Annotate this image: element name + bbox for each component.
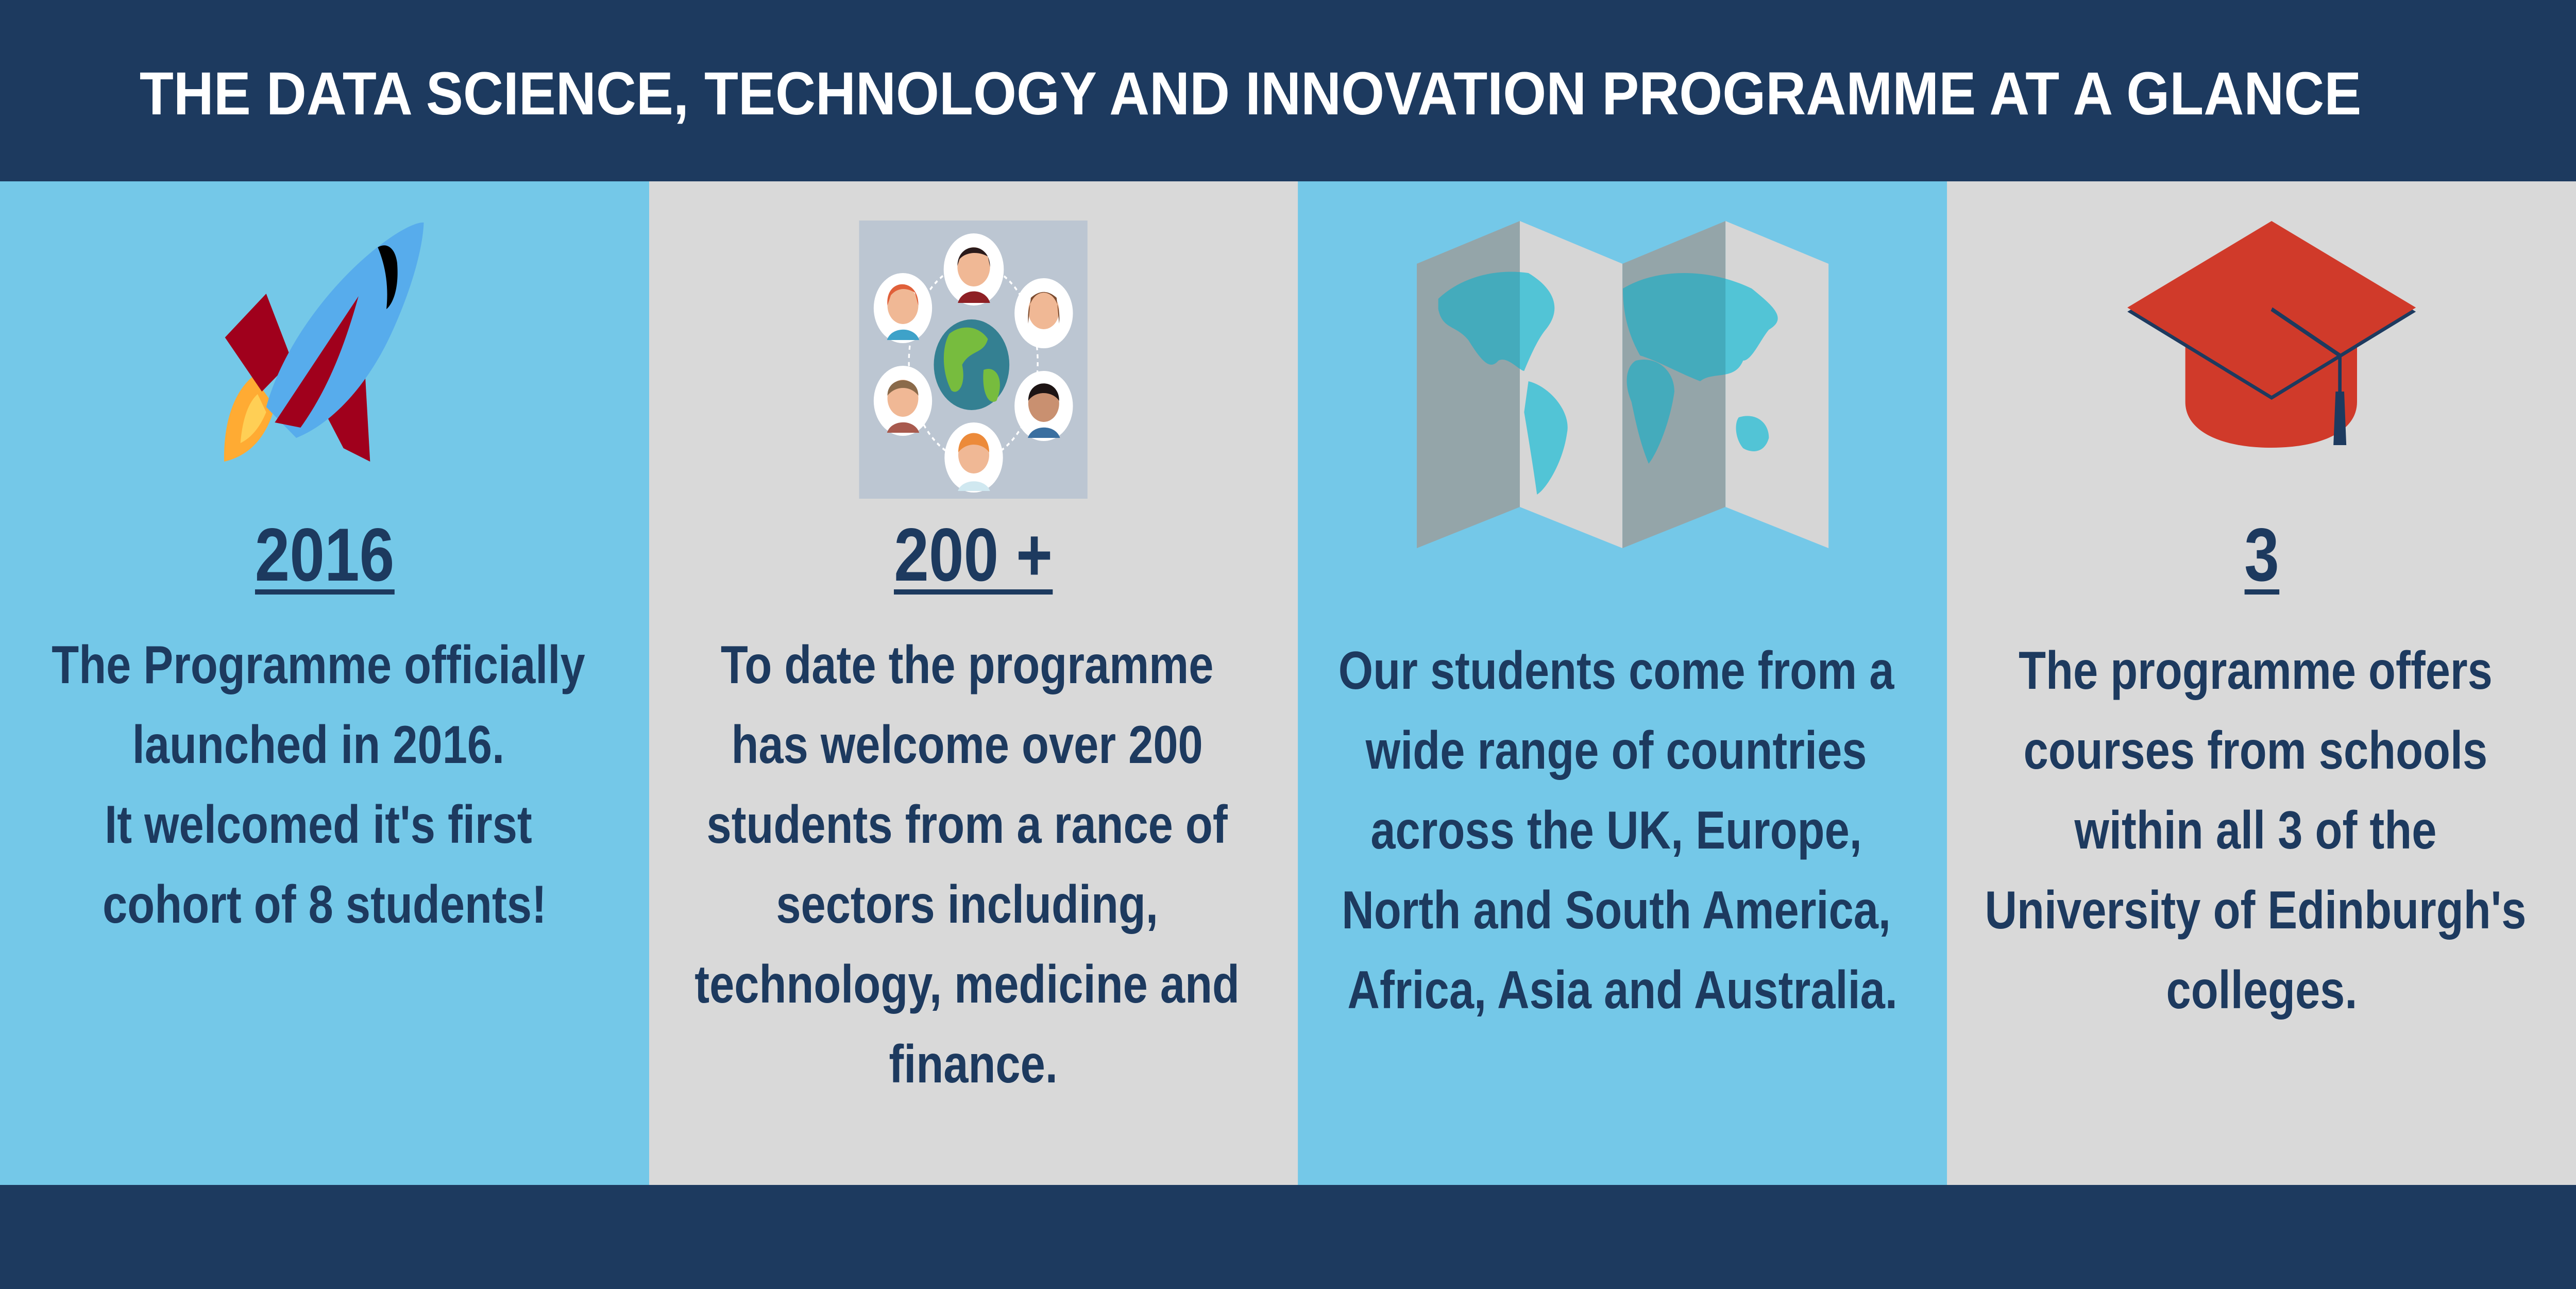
text: launch: cohort of 8 students!	[103, 875, 547, 935]
panel: countries	[1298, 181, 1947, 1185]
panel: students	[649, 181, 1298, 1185]
text: students: To date the programme	[721, 635, 1213, 695]
text: countries: across the UK, Europe,	[1370, 801, 1862, 860]
heading: 3: 3	[2244, 513, 2279, 597]
title: THE DATA SCIENCE, TECHNOLOGY AND INNOVATION PROGRAMME AT A GLANCE	[140, 60, 2361, 128]
text: students: has welcome over 200	[731, 715, 1203, 775]
text: colleges: The programme offers	[2019, 641, 2493, 701]
text: launch: launched in 2016.	[132, 715, 504, 775]
footer bar	[0, 1185, 2576, 1289]
header bar	[0, 0, 2576, 181]
icon: folded world map	[1417, 221, 1828, 548]
text: countries: Our students come from a	[1338, 641, 1894, 701]
icon: graduation cap	[2127, 221, 2416, 448]
text: launch: The Programme officially	[52, 635, 585, 695]
text: colleges: colleges.	[2166, 960, 2357, 1020]
icon: rocket	[224, 223, 423, 462]
text: colleges: courses from schools	[2024, 721, 2487, 781]
heading: 2016: 2016	[255, 513, 394, 597]
panel: launch year	[0, 181, 649, 1185]
text: colleges: within all 3 of the	[2074, 801, 2436, 860]
text: students: finance.	[889, 1034, 1058, 1094]
text: students: students from a rance of	[707, 795, 1228, 855]
text: launch: It welcomed it's first	[105, 795, 532, 855]
text: countries: North and South America,	[1342, 880, 1891, 940]
panel: colleges	[1947, 181, 2576, 1185]
text: students: technology, medicine and	[694, 955, 1240, 1014]
text: countries: Africa, Asia and Australia.	[1347, 960, 1897, 1020]
icon: people around globe	[859, 221, 1088, 499]
heading: 200+: 200 +	[894, 513, 1053, 597]
text: countries: wide range of countries	[1365, 721, 1867, 781]
text: colleges: University of Edinburgh's	[1985, 880, 2526, 940]
text: students: sectors including,	[776, 875, 1158, 935]
